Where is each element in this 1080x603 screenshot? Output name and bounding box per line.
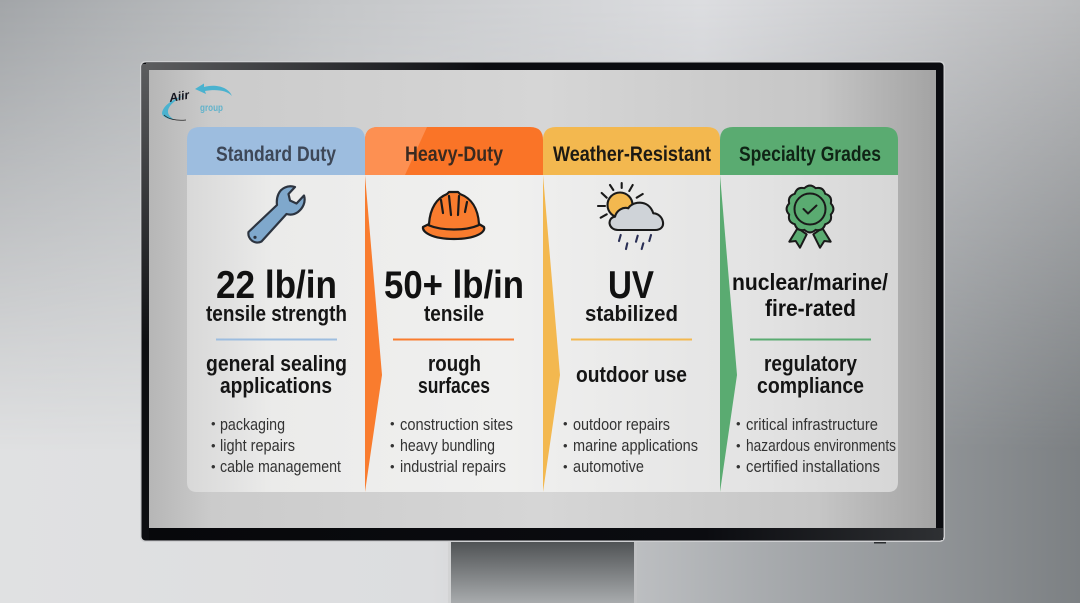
column: Heavy-Duty: [384, 143, 524, 476]
column: Weather-Resistant: automotive: [573, 457, 644, 476]
column headers: [187, 127, 898, 175]
column: Specialty Grades: hazardous environments: [746, 436, 896, 455]
column: Standard Duty: •: [211, 438, 216, 453]
column: Standard Duty: packaging: [220, 415, 285, 434]
column: Weather-Resistant: marine applications: [573, 436, 698, 455]
column: Heavy-Duty: heavy bundling: [400, 436, 495, 455]
column: Heavy-Duty: Heavy-Duty: [405, 143, 503, 166]
column: Standard Duty: Standard Duty: [216, 143, 336, 166]
column: Standard Duty: [206, 143, 347, 476]
column: Heavy-Duty: construction sites: [400, 415, 513, 434]
column: Standard Duty: light repairs: [220, 436, 295, 455]
column: Specialty Grades: [732, 143, 896, 476]
column: Heavy-Duty: •: [390, 438, 395, 453]
column: Standard Duty: applications: [220, 373, 332, 398]
column: Weather-Resistant: stabilized: [585, 301, 678, 326]
column: Specialty Grades: •: [736, 459, 741, 474]
column: Specialty Grades: critical infrastructure: [746, 415, 878, 434]
column: Specialty Grades: •: [736, 438, 741, 453]
column: Specialty Grades: nuclear/marine/: [732, 269, 889, 295]
comparison table: [187, 127, 898, 492]
column: Heavy-Duty: industrial repairs: [400, 457, 506, 476]
column: Standard Duty: •: [211, 416, 216, 431]
logo: group: [200, 102, 223, 114]
column: Specialty Grades: •: [736, 416, 741, 431]
column: Heavy-Duty: rough: [428, 351, 481, 376]
monitor frame: [140, 61, 945, 544]
icon: sun, cloud and rain: [598, 183, 663, 249]
column: Standard Duty: 22 lb/in: [216, 264, 337, 307]
column: Standard Duty: cable management: [220, 457, 341, 476]
column: Specialty Grades: Specialty Grades: [739, 143, 881, 166]
column: Standard Duty: tensile strength: [206, 301, 347, 326]
column: Weather-Resistant: •: [563, 459, 568, 474]
icon: wrench: [248, 186, 305, 243]
column: Heavy-Duty: surfaces: [418, 373, 490, 398]
column: Weather-Resistant: •: [563, 416, 568, 431]
screen: [149, 70, 936, 528]
column: Heavy-Duty: •: [390, 459, 395, 474]
logo: [162, 84, 232, 120]
column: Specialty Grades: fire-rated: [765, 295, 856, 321]
column: Specialty Grades: compliance: [757, 373, 864, 398]
column: Standard Duty: •: [211, 459, 216, 474]
icon: hard hat: [423, 192, 484, 239]
column arrow wedges: [365, 175, 737, 492]
column: Weather-Resistant: outdoor repairs: [573, 415, 670, 434]
column: Specialty Grades: certified installations: [746, 457, 880, 476]
column: Weather-Resistant: [553, 143, 711, 476]
column: Weather-Resistant: outdoor use: [576, 362, 687, 387]
column: Weather-Resistant: •: [563, 438, 568, 453]
logo: Aiir: [167, 87, 192, 105]
card body: [187, 175, 898, 492]
column: Weather-Resistant: UV: [608, 264, 654, 307]
column: Heavy-Duty: tensile: [424, 301, 484, 326]
column: Weather-Resistant: Weather-Resistant: [553, 143, 711, 166]
column: Standard Duty: general sealing: [206, 351, 347, 376]
column: Heavy-Duty: 50+ lb/in: [384, 264, 524, 307]
icon: rosette badge: [787, 186, 833, 248]
column: Specialty Grades: regulatory: [764, 351, 858, 376]
column: Heavy-Duty: •: [390, 416, 395, 431]
monitor stand: [448, 542, 637, 603]
